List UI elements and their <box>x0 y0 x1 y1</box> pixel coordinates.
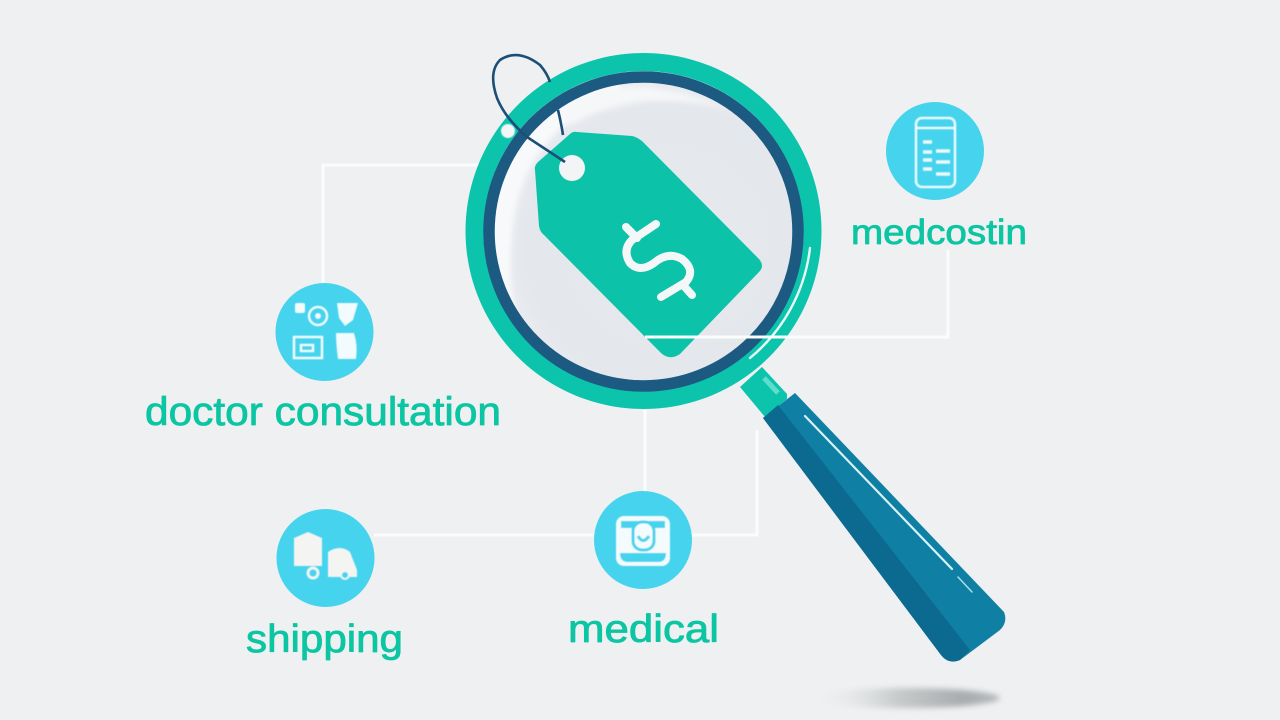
shipping label: shipping <box>246 618 403 661</box>
medical label: medical <box>568 608 719 651</box>
dollar sign <box>626 224 692 297</box>
medcost group <box>851 102 1027 252</box>
medical icon <box>616 516 670 566</box>
medcost icon phone <box>916 118 955 187</box>
ring spot <box>501 124 515 138</box>
lens <box>494 82 794 382</box>
medcost label: medcostin <box>851 213 1027 252</box>
ground shadow <box>810 688 1000 708</box>
medcost icon circle <box>886 102 984 200</box>
connector lines <box>323 165 757 535</box>
shipping icon truck and box <box>294 532 357 579</box>
shipping icon circle <box>276 509 374 607</box>
doctor consultation group <box>145 283 501 434</box>
magnifying glass <box>466 53 1005 662</box>
tag string inside lens <box>558 110 563 135</box>
handle <box>763 378 1005 662</box>
medical group <box>568 491 719 651</box>
navy ring <box>489 77 798 386</box>
tag hole <box>559 155 585 181</box>
doctor label: doctor consultation <box>145 390 501 434</box>
medical icon circle <box>594 491 692 589</box>
left crescent <box>495 85 618 303</box>
shipping group <box>246 509 403 661</box>
doctor icons <box>294 303 358 359</box>
price tag <box>493 55 762 357</box>
connector line medcost <box>645 250 948 337</box>
lens highlights <box>495 85 706 303</box>
tag string <box>493 55 565 162</box>
handle neck <box>740 367 787 417</box>
doctor icon circle <box>276 283 374 381</box>
ring highlight <box>750 248 810 358</box>
outer ring <box>466 53 822 409</box>
top crescent <box>574 88 706 121</box>
